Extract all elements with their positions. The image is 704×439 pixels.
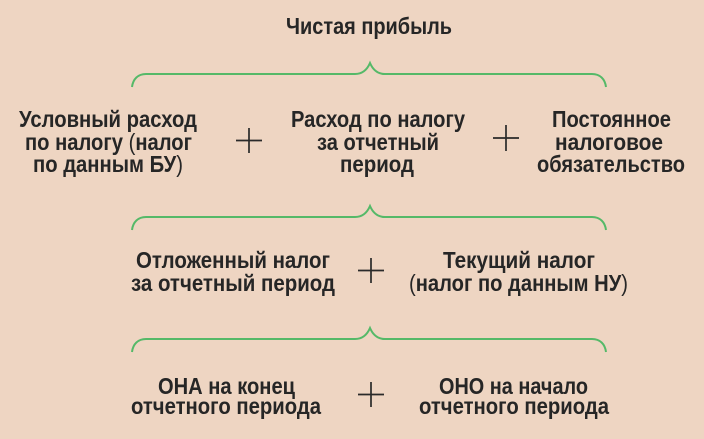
text: conditional tax expense: по налогу (налог	[25, 129, 192, 155]
text: conditional tax expense: Условный расход	[19, 106, 197, 132]
text: deferred tax asset at period end: отчетного периода	[131, 393, 321, 419]
middle brace	[132, 206, 606, 230]
text: deferred tax liability at period start	[419, 373, 609, 419]
text: deferred tax for the period	[131, 247, 335, 296]
text: current tax	[409, 247, 628, 296]
text: permanent tax liability: Постоянное	[552, 106, 671, 132]
text: tax expense for the period: Расход по налогу	[291, 106, 465, 132]
plus sign 4	[358, 382, 384, 407]
text: deferred tax for the period: за отчетный период	[131, 270, 335, 296]
text: current tax: (налог по данным НУ)	[409, 270, 628, 296]
text: tax expense for the period: период	[340, 151, 414, 177]
text: deferred tax asset at period end: ОНА на конец	[158, 373, 295, 399]
top brace	[132, 63, 606, 87]
text: permanent tax liability	[537, 106, 685, 177]
text: deferred tax for the period: Отложенный налог	[136, 247, 330, 273]
text: permanent tax liability: налоговое	[555, 129, 663, 155]
bottom brace	[132, 328, 606, 352]
text: conditional tax expense: по данным БУ)	[33, 151, 183, 177]
text: permanent tax liability: обязательство	[537, 151, 685, 177]
plus sign 1	[236, 128, 262, 153]
heading: net profit: Чистая прибыль	[286, 13, 452, 39]
text: deferred tax asset at period end	[131, 373, 321, 419]
plus sign 3	[358, 258, 384, 283]
plus sign 2	[493, 125, 519, 151]
text: deferred tax liability at period start: отчетного периода	[419, 393, 609, 419]
text: current tax: Текущий налог	[443, 247, 595, 273]
text: tax expense for the period	[291, 106, 465, 177]
text: deferred tax liability at period start: ОНО на начало	[439, 373, 588, 399]
text: tax expense for the period: за отчетный	[317, 129, 439, 155]
text: conditional tax expense	[19, 106, 197, 177]
